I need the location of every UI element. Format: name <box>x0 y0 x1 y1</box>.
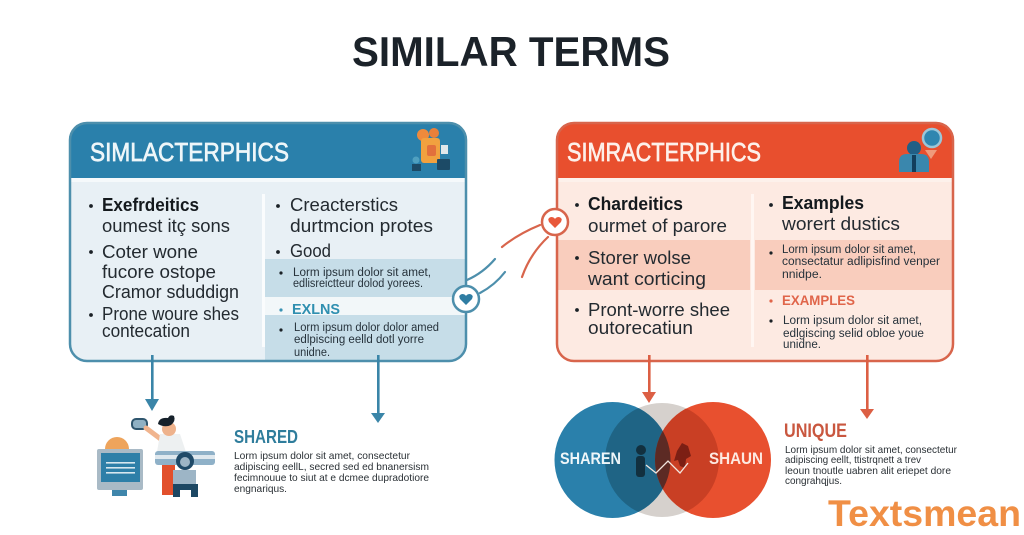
right column bullets <box>276 195 439 359</box>
right column bullets: EXLNS <box>292 301 340 318</box>
left column bullets: Chardeitics <box>588 194 683 214</box>
right column bullets: edlpiscing eelld dotl yorre <box>294 334 424 346</box>
arrow: right card down 2 <box>860 355 874 419</box>
arrow: left card down 1 <box>145 355 159 411</box>
left column bullets: want corticing <box>587 269 706 289</box>
shared text block: engnariqus. <box>234 483 287 495</box>
left column bullets <box>89 195 239 341</box>
shared text block: adipiscing eellL, secred sed ed bnanersism <box>234 461 429 473</box>
unique text block: congrahqjus. <box>785 475 842 487</box>
icon: left card header icon <box>412 128 450 171</box>
unique text block: adipiscing eellt, ttistrqnett a trev <box>785 454 922 466</box>
left column bullets: Exefrdeitics <box>102 195 199 215</box>
left card heading: SIMLACTERPHICS <box>90 137 289 167</box>
left column bullets: Pront-worre shee <box>588 300 730 320</box>
shared text block: SHARED <box>234 427 298 447</box>
right column bullets: Lorm ipsum dolor dolor amed <box>294 322 439 334</box>
right column bullets: Lorm ipsum dolor sit amet, <box>782 244 916 256</box>
icon: right card header icon <box>899 129 941 172</box>
title: SIMILAR TERMS <box>352 28 670 75</box>
right column bullets: unidne. <box>294 347 330 359</box>
panel: right red card <box>557 123 953 361</box>
right card heading: SIMRACTERPHICS <box>567 137 761 167</box>
icon: blue heart badge <box>453 286 479 312</box>
right column bullets: Lorm ipsum dolor sit amet, <box>783 315 922 327</box>
right column bullets: nnidpe. <box>782 269 822 281</box>
left column bullets: contecation <box>102 321 190 341</box>
left column bullets: Storer wolse <box>588 248 691 268</box>
right column bullets: Creacterstics <box>290 195 398 215</box>
left column bullets: Coter wone <box>102 242 198 262</box>
right column bullets: Lorm ipsum dolor sit amet, <box>293 267 431 279</box>
left column bullets: ourmet of parore <box>588 216 727 236</box>
unique text block: UNIQUE <box>784 421 847 442</box>
right column bullets: EXAMPLES <box>782 292 855 308</box>
right column bullets <box>769 193 940 351</box>
right column bullets: Good <box>290 241 331 261</box>
connector between cards <box>467 225 548 293</box>
arrow: left card down 2 <box>371 355 385 423</box>
arrow: right card down 1 <box>642 355 656 403</box>
left column bullets: outorecatiun <box>588 318 693 338</box>
left column bullets: Prone woure shes <box>102 304 239 324</box>
right column bullets: consectatur adlipisfind venper <box>782 256 940 268</box>
unique text block <box>784 421 957 487</box>
icon: monitor and people illustration <box>97 415 215 497</box>
right column bullets: Examples <box>782 193 864 213</box>
right column bullets: edlisreictteur dolod yorees. <box>293 278 423 290</box>
venn left label: SHAREN <box>560 449 621 468</box>
left column bullets: fucore ostope <box>102 262 216 282</box>
shared text block: fecimnouue to siut at e dcmee dupradotiore <box>234 472 429 484</box>
unique text block: Lorm ipsum dolor sit amet, consectetur <box>785 444 957 456</box>
unique text block: leoun tnoutle uabren alit eriepet dore <box>785 465 951 477</box>
shared text block: Lorm ipsum dolor sit amet, consectetur <box>234 450 410 462</box>
left column bullets: oumest itç sons <box>102 216 230 236</box>
left column bullets: Cramor sduddign <box>102 282 239 302</box>
right column bullets: edlgiscing selid obloe youe <box>783 328 924 340</box>
right column bullets: unidne. <box>783 339 821 351</box>
panel: left blue card <box>70 123 466 361</box>
watermark: Textsmean <box>828 493 1021 534</box>
venn diagram <box>554 402 771 518</box>
venn right label: SHAUN <box>709 449 763 468</box>
right column bullets: worert dustics <box>781 214 900 234</box>
left column bullets <box>575 194 730 338</box>
shared text block <box>234 427 429 495</box>
right column bullets: durtmcion protes <box>290 216 433 236</box>
icon: red heart badge <box>542 209 568 235</box>
